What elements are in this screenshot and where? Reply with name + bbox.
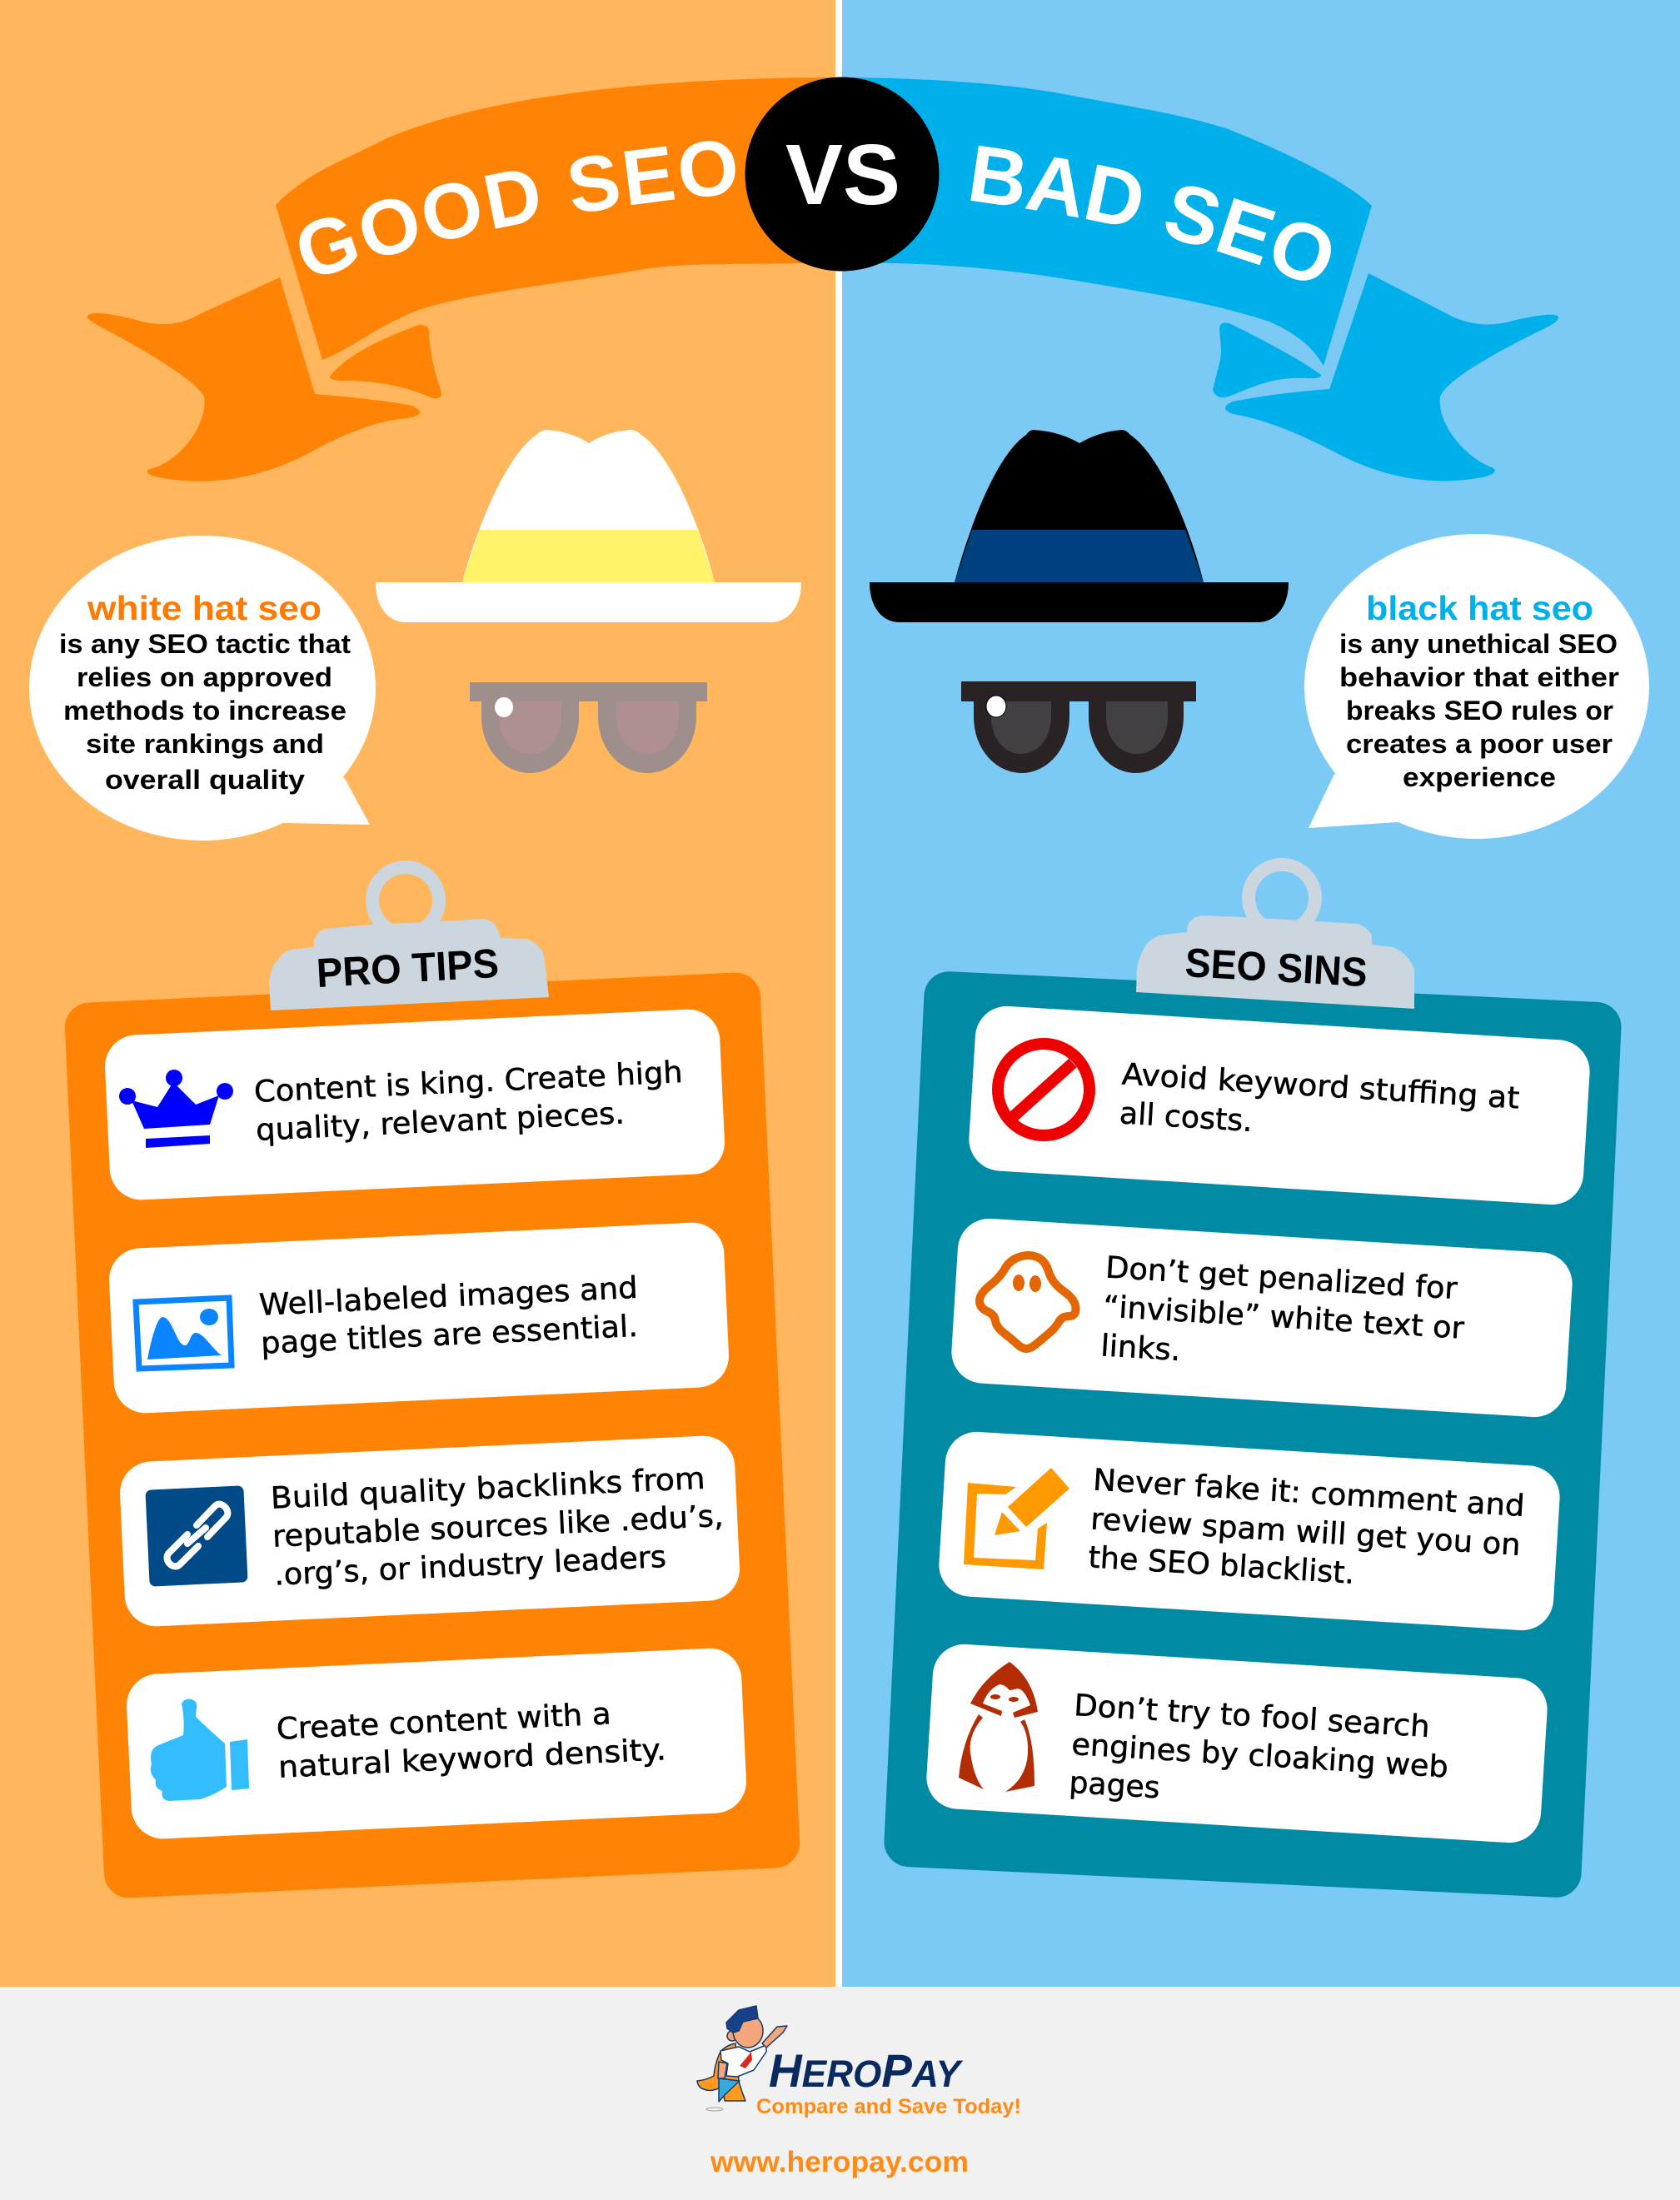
tip card: backlinks: .org’s, or industry leaders: [273, 1540, 667, 1593]
right background panel: [842, 0, 1680, 1987]
speech bubble: white hat seo: [29, 536, 376, 841]
clipboard tab: pro tips: PRO TIPS: [316, 941, 500, 996]
left background panel: [0, 0, 835, 1987]
footer background: [0, 1987, 1680, 2200]
speech bubble: white hat seo: relies on approved: [77, 662, 332, 692]
tip card: backlinks: [118, 1434, 741, 1628]
banner: good seo ribbon: [87, 77, 842, 481]
speech bubble: black hat seo: creates a poor user: [1346, 729, 1613, 759]
icon: link: [145, 1485, 248, 1587]
tip card: backlinks: Build quality backlinks from: [270, 1462, 705, 1516]
ribbon band left: [276, 77, 842, 360]
sin card: comment spam: review spam will get you on: [1089, 1502, 1522, 1563]
tip card: keyword density: Create content with a: [276, 1697, 612, 1747]
tip card: backlinks: reputable sources like .edu’s,: [272, 1499, 725, 1554]
speech bubble: white hat seo: overall quality: [105, 765, 305, 795]
icon: prohibited: [998, 1044, 1089, 1135]
clipboard ring: [1249, 865, 1315, 931]
ribbon fold left: [330, 325, 441, 398]
icon: cloaked penguin: [959, 1662, 1038, 1792]
clipboard ring: [372, 867, 439, 934]
speech bubble: black hat seo: experience: [1403, 762, 1556, 792]
tip card: labeled images: [107, 1221, 730, 1414]
banner: bad seo ribbon: [842, 77, 1558, 481]
ribbon fold right: [1213, 322, 1321, 397]
panel: pro tips clipboard: [64, 867, 800, 1899]
sin card: keyword stuffing: [967, 1005, 1592, 1206]
footer tagline: Compare and Save Today!: [756, 2095, 1021, 2118]
white hat: [376, 430, 801, 622]
sin card: cloaking: Don’t try to fool search: [1073, 1689, 1431, 1744]
sin card: keyword stuffing: Avoid keyword stuffing at: [1121, 1057, 1520, 1116]
icon: crown: [119, 1070, 233, 1148]
vs badge: [745, 77, 940, 272]
speech bubble: black hat seo: is any unethical SEO: [1339, 629, 1618, 659]
tip card: content is king: quality, relevant pieces.: [255, 1096, 626, 1148]
icon: edit: [964, 1468, 1069, 1569]
sin card: invisible text: “invisible” white text or: [1102, 1290, 1465, 1346]
black hat glasses: [961, 681, 1196, 773]
clipboard tab: seo sins: [1136, 915, 1414, 1009]
tip card: labeled images: Well-labeled images and: [258, 1271, 639, 1323]
sin card: comment spam: the SEO blacklist.: [1087, 1540, 1355, 1591]
ribbon tail right: [1225, 273, 1558, 481]
speech bubble: white hat seo: methods to increase: [63, 696, 346, 726]
speech bubble: black hat seo: breaks SEO rules or: [1346, 696, 1613, 726]
ribbon band right: [842, 77, 1372, 366]
heading: bad seo: BAD SEO: [970, 145, 1331, 281]
tip card: keyword density: [125, 1647, 748, 1840]
sin card: comment spam: [937, 1430, 1562, 1632]
speech bubble: white hat seo: is any SEO tactic that: [59, 629, 351, 659]
speech bubble: white hat seo: site rankings and: [86, 729, 324, 759]
clipboard tab: seo sins: SEO SINS: [1184, 940, 1368, 995]
sin card: keyword stuffing: all costs.: [1119, 1096, 1254, 1139]
clipboard tab: pro tips: [269, 919, 549, 1010]
tip card: content is king: [103, 1008, 726, 1201]
footer logo: heropay wordmark: HEROPAY: [769, 2044, 964, 2097]
ribbon tail left: [87, 277, 420, 481]
tip card: labeled images: page titles are essential.: [260, 1310, 639, 1361]
sin card: cloaking: [925, 1643, 1549, 1844]
tip card: content is king: Content is king. Create high: [253, 1055, 684, 1110]
sin card: invisible text: Don’t get penalized for: [1104, 1250, 1458, 1306]
sin card: invisible text: [950, 1217, 1574, 1419]
footer logo: heropay mascot: [697, 2006, 787, 2111]
icon: image: [136, 1298, 232, 1369]
sin card: comment spam: Never fake it: comment and: [1092, 1463, 1526, 1524]
clipboard board: [883, 970, 1623, 1898]
icon: ghost: [980, 1255, 1076, 1349]
heading: good seo: GOOD SEO: [300, 141, 735, 275]
clipboard board: [64, 971, 800, 1899]
panel: seo sins clipboard: [883, 865, 1623, 1898]
sin card: cloaking: engines by cloaking web: [1070, 1728, 1449, 1785]
sin card: invisible text: links.: [1099, 1329, 1182, 1368]
speech bubble: black hat seo: black hat seo: [1366, 589, 1593, 627]
vs badge: VS: [785, 127, 900, 222]
black hat: [870, 430, 1289, 622]
footer url: www.heropay.com: [710, 2146, 969, 2178]
tip card: keyword density: natural keyword density.: [277, 1733, 667, 1785]
speech bubble: black hat seo: behavior that either: [1339, 662, 1619, 692]
white hat glasses: [470, 682, 707, 773]
speech bubble: black hat seo: [1304, 534, 1649, 839]
speech bubble: white hat seo: white hat seo: [87, 589, 322, 627]
sin card: cloaking: pages: [1068, 1766, 1161, 1805]
icon: thumbs up: [151, 1699, 249, 1801]
